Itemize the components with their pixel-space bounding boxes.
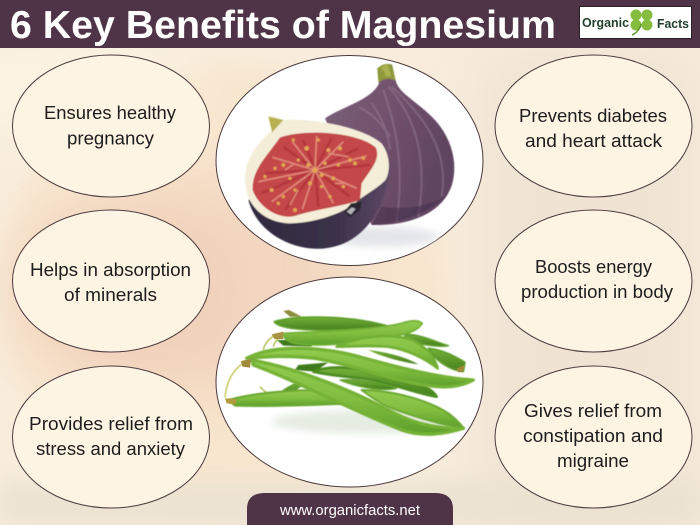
photo: green beans <box>216 277 483 487</box>
shadow under beans <box>272 410 458 433</box>
icon: halved fig <box>245 115 391 249</box>
icon: back beans <box>228 310 465 428</box>
benefit: Provides relief from stress and anxiety: stress and anxiety <box>36 439 185 459</box>
footer: website pill: www.organicfacts.net <box>279 503 420 519</box>
icon: whole fig <box>325 64 454 225</box>
logo: Organic Facts: Facts <box>657 17 689 31</box>
benefit: Gives relief from constipation and migraine <box>495 366 692 508</box>
benefit: Ensures healthy pregnancy <box>12 55 210 197</box>
benefit: Provides relief from stress and anxiety <box>12 366 210 508</box>
benefit: Prevents diabetes and heart attack: Prevents diabetes <box>519 106 667 126</box>
header bar <box>0 0 700 48</box>
benefit: Boosts energy production in body <box>495 210 692 352</box>
logo: Organic Facts: Organic <box>582 16 629 30</box>
benefit: Boosts energy production in body: Boosts energy <box>535 257 652 277</box>
shadow under figs <box>325 227 438 247</box>
title: 6 Key Benefits of Magnesium <box>10 4 556 47</box>
footer: website pill <box>247 493 453 525</box>
benefit: Provides relief from stress and anxiety: Provides relief from <box>29 414 193 434</box>
benefit: Gives relief from constipation and migraine: migraine <box>557 451 629 471</box>
icon: front beans <box>225 348 473 434</box>
benefit: Prevents diabetes and heart attack <box>495 55 692 197</box>
benefit: Prevents diabetes and heart attack: and heart attack <box>525 131 663 151</box>
photo: figs <box>216 56 483 266</box>
benefit: Gives relief from constipation and migraine: constipation and <box>523 426 663 446</box>
benefit: Boosts energy production in body: production in body <box>521 282 673 302</box>
benefit: Helps in absorption of minerals: of minerals <box>64 285 157 305</box>
logo: Organic Facts <box>580 6 692 38</box>
benefit: Gives relief from constipation and migraine: Gives relief from <box>524 401 662 421</box>
icon: clover <box>630 10 652 35</box>
benefit: Helps in absorption of minerals <box>12 210 210 352</box>
benefit: Helps in absorption of minerals: Helps in absorption <box>30 260 191 280</box>
benefit: Ensures healthy pregnancy: Ensures healthy <box>44 103 176 123</box>
benefit: Ensures healthy pregnancy: pregnancy <box>67 128 154 148</box>
